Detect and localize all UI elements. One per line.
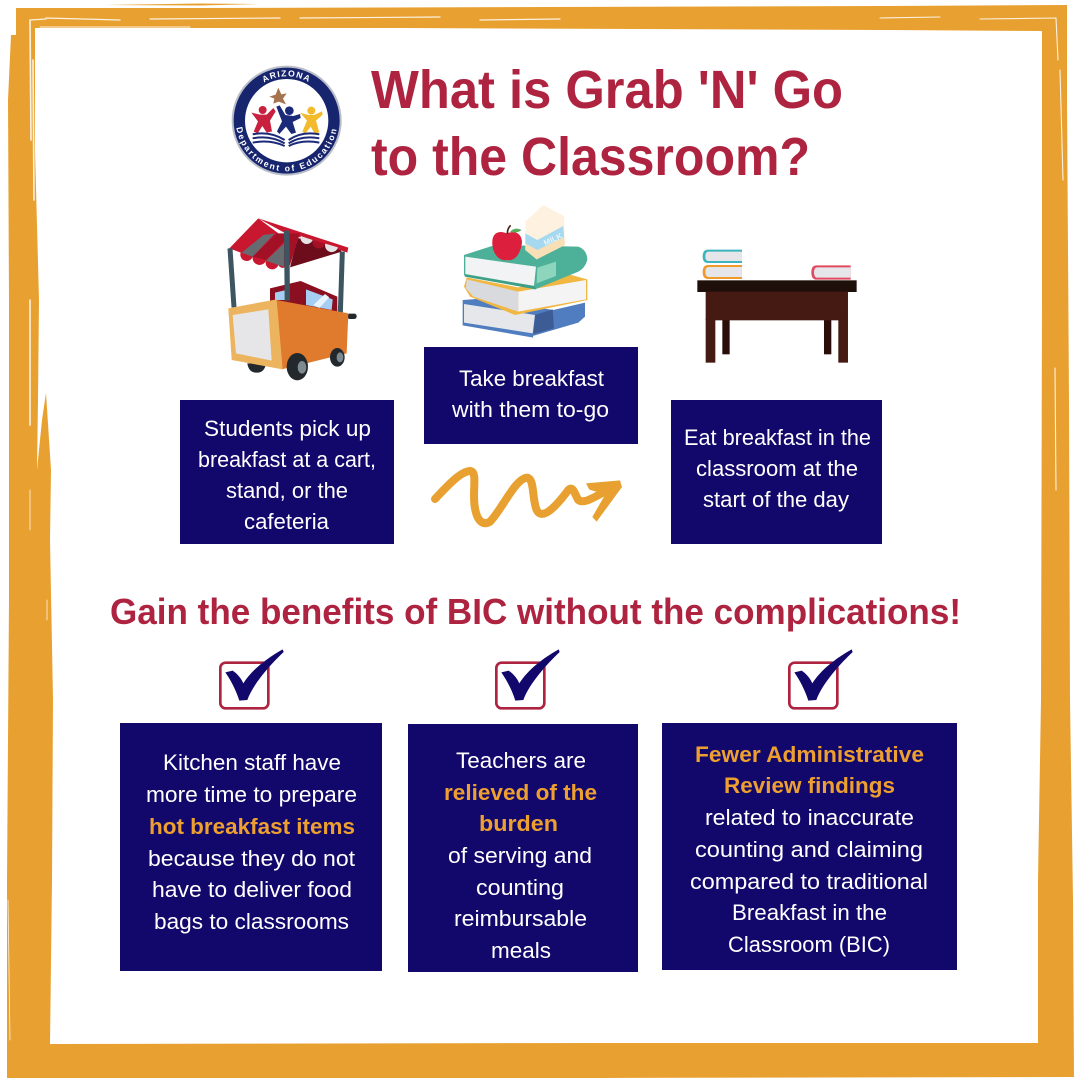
panel: kitchen staff benefit: have to deliver food [152, 877, 352, 902]
panel: administrative review benefit [662, 723, 957, 970]
panel: administrative review benefit: Review findings [724, 773, 895, 798]
icon: teacher desk with books [697, 250, 857, 363]
panel: step 3: start of the day [703, 487, 849, 512]
panel: administrative review benefit: compared to traditional [690, 869, 928, 894]
panel: teachers benefit: of serving and [448, 843, 592, 868]
panel: administrative review benefit: Fewer Administrative [695, 742, 924, 767]
logo: Arizona Department of Education [232, 66, 342, 176]
icon: books with apple and milk [463, 205, 587, 338]
panel: step 1: cafeteria [244, 509, 330, 534]
panel: administrative review benefit: counting and claiming [695, 837, 923, 862]
panel: step 2: Take breakfast [459, 366, 604, 391]
panel: teachers benefit: Teachers are [456, 748, 586, 773]
panel: administrative review benefit: related to inaccurate [705, 805, 914, 830]
arrow: squiggle [435, 471, 622, 523]
logo: Arizona Department of Education: Department of Education [236, 126, 336, 172]
panel: step 1 [180, 400, 394, 544]
icon: checkmark 3 [789, 649, 853, 708]
panel: kitchen staff benefit: bags to classrooms [154, 909, 349, 934]
panel: kitchen staff benefit: more time to prepare [146, 782, 357, 807]
panel: step 3: classroom at the [696, 456, 858, 481]
icon: checkmark 2 [496, 649, 560, 708]
title: What is Grab 'N' Go [371, 60, 843, 120]
icon: checkmark 1 [220, 649, 284, 708]
heading: benefits: Gain the benefits of BIC without the complications! [110, 591, 961, 632]
panel: teachers benefit [408, 724, 638, 972]
panel: kitchen staff benefit: because they do not [148, 846, 355, 871]
panel: step 2 [424, 347, 638, 444]
panel: step 2: with them to-go [451, 397, 609, 422]
panel: administrative review benefit: Breakfast in the [732, 900, 887, 925]
panel: kitchen staff benefit [120, 723, 382, 971]
title [371, 60, 843, 187]
panel: step 1: Students pick up [204, 416, 371, 441]
panel: teachers benefit: meals [491, 938, 551, 963]
icon: books with apple and milk: MILK [542, 231, 564, 248]
panel: administrative review benefit: Classroom (BIC) [728, 932, 890, 957]
panel: kitchen staff benefit: Kitchen staff have [163, 750, 341, 775]
panel: kitchen staff benefit: hot breakfast items [149, 814, 355, 839]
panel: step 3: Eat breakfast in the [684, 425, 871, 450]
logo: Arizona Department of Education: ARIZONA [263, 70, 309, 82]
icon: breakfast cart [228, 218, 357, 380]
panel: teachers benefit: reimbursable [454, 906, 587, 931]
panel: step 1: breakfast at a cart, [198, 447, 376, 472]
panel: teachers benefit: burden [479, 811, 558, 836]
panel: teachers benefit: counting [476, 875, 564, 900]
panel: teachers benefit: relieved of the [444, 780, 597, 805]
title: to the Classroom? [371, 127, 810, 187]
panel: step 1: stand, or the [226, 478, 348, 503]
panel: step 3 [671, 400, 882, 544]
